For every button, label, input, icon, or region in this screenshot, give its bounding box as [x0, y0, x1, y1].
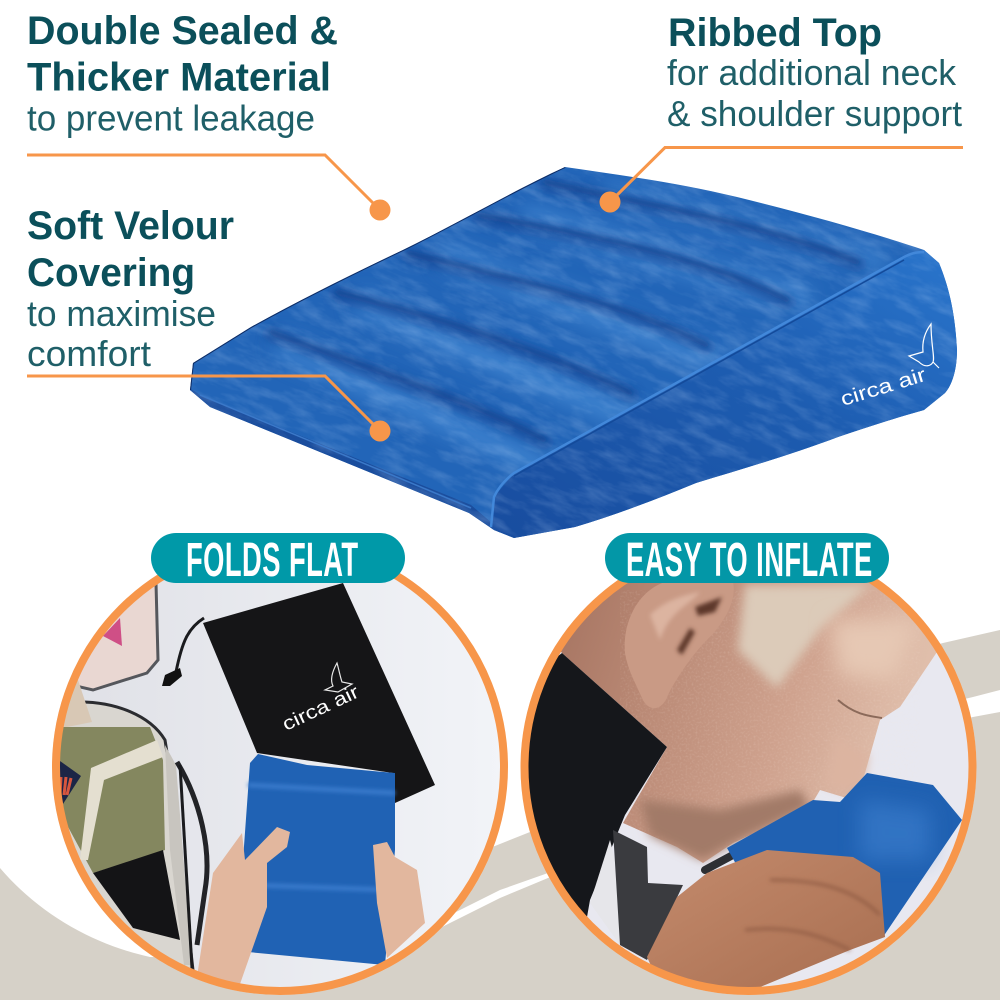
orange ring — [56, 543, 504, 991]
photo background — [520, 539, 976, 995]
orange ring — [524, 543, 972, 991]
side face — [490, 250, 965, 545]
grey fleece — [613, 830, 683, 960]
groove soft shadows — [271, 184, 858, 442]
subtext: to maximise — [27, 293, 216, 334]
panel: folds flat photo circle — [50, 539, 508, 995]
front lower band — [190, 388, 500, 532]
folded blue pillow — [243, 754, 395, 965]
grey hair — [738, 585, 870, 688]
silver frame — [165, 745, 192, 965]
head — [561, 582, 936, 863]
subtext: for additional neck — [667, 52, 957, 93]
suitcase base rim — [68, 700, 194, 970]
banner: easy to inflate: EASY TO INFLATE — [626, 534, 872, 587]
front fold seam — [200, 395, 471, 508]
photo ring — [52, 539, 508, 995]
suitcase upper lid — [78, 584, 160, 692]
subtext second line: comfort — [27, 333, 151, 374]
black fleece collar — [515, 653, 667, 917]
bag drawstring — [176, 618, 204, 672]
beige garment edge — [64, 680, 92, 727]
back edge dark seam — [190, 167, 565, 390]
callout: double sealed — [27, 9, 390, 220]
forehead highlight — [830, 620, 920, 680]
side logo — [838, 324, 939, 411]
hand — [647, 850, 885, 990]
ear — [625, 582, 734, 708]
side seam — [491, 252, 924, 527]
black clothes — [93, 850, 180, 940]
panel: easy to inflate photo circle — [520, 579, 976, 995]
left hand — [198, 827, 290, 984]
photo contents — [528, 582, 962, 987]
subtext second line: & shoulder support — [667, 93, 962, 134]
leader line and dot — [27, 376, 390, 442]
leader line and dot — [27, 155, 390, 220]
bag logo — [284, 662, 357, 730]
banner: folds flat: FOLDS FLAT — [186, 534, 358, 587]
right hand — [373, 842, 425, 958]
callout: soft velour — [27, 204, 390, 442]
heading: Double Sealed & — [27, 9, 338, 53]
logo wordmark: circa air — [838, 364, 929, 411]
heading: Ribbed Top — [668, 11, 882, 55]
pillow base shape — [190, 167, 957, 538]
photo contents — [50, 583, 435, 984]
wedge pillow product photo — [190, 167, 957, 538]
subtext: to prevent leakage — [27, 98, 315, 138]
blue pillow — [727, 773, 962, 960]
beige wave background — [0, 630, 1000, 1000]
leader line and dot — [600, 148, 963, 212]
canvas strap — [80, 740, 163, 860]
bag wordmark: circa air — [279, 681, 363, 736]
callout: ribbed top — [600, 11, 963, 212]
olive cloth — [55, 727, 165, 873]
rib grooves — [271, 182, 858, 440]
black bag — [203, 583, 435, 803]
nose highlight — [846, 752, 872, 784]
flag patch — [60, 761, 81, 804]
heading second line: Thicker Material — [27, 56, 331, 100]
inflation valve — [705, 810, 813, 870]
logo hummingbird — [909, 324, 939, 368]
heading: Soft Velour — [27, 204, 234, 248]
bag hummingbird — [325, 663, 352, 692]
stubble jaw shade — [640, 790, 810, 860]
banner: folds flat — [151, 533, 405, 587]
rib highlights — [285, 192, 880, 465]
heading second line: Covering — [27, 251, 195, 295]
suitcase handle — [177, 762, 207, 945]
skin grain — [620, 590, 887, 831]
pillow shading and ribs — [190, 167, 957, 538]
eye — [838, 700, 882, 718]
velour mottled texture — [190, 170, 956, 536]
white shirt — [590, 840, 625, 945]
